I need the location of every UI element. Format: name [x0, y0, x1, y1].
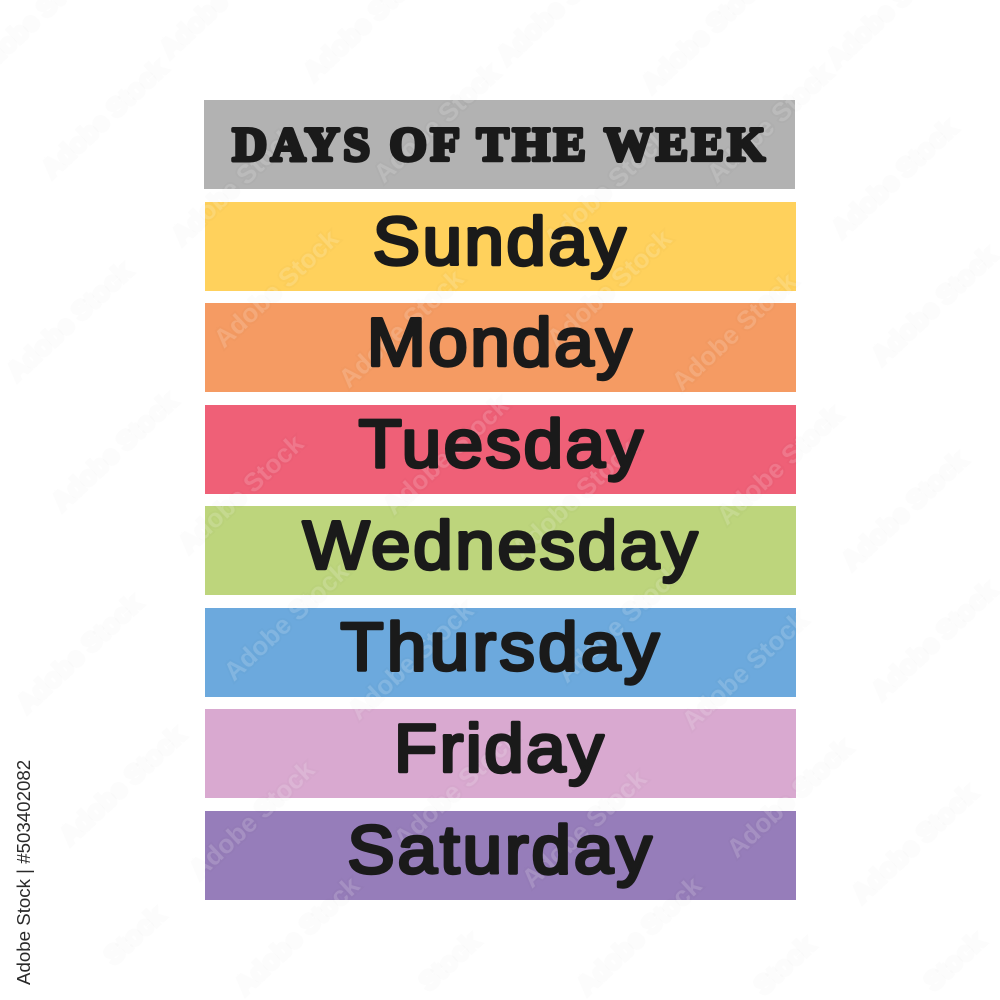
stock watermark overlay: Adobe Stock: [676, 605, 813, 736]
stock watermark overlay: Adobe Stock: [571, 870, 708, 1000]
stock watermark overlay: Adobe Stock: [666, 266, 803, 397]
stock watermark overlay: Adobe Stock: [866, 240, 1000, 371]
stock watermark overlay: Adobe Stock: [343, 595, 480, 726]
stock watermark overlay: Adobe Stock: [846, 778, 983, 909]
stock id side text: Adobe Stock | #503402082: [13, 760, 34, 985]
stock watermark overlay: Adobe Stock: [36, 53, 173, 184]
stock watermark overlay: Adobe Stock: [208, 223, 345, 354]
stock watermark overlay: Adobe Stock: [1, 256, 138, 387]
stock watermark overlay: Adobe Stock: [516, 763, 653, 894]
stock watermark overlay: Stock: [413, 926, 485, 997]
label: Sunday: Sunday: [373, 203, 628, 279]
stock watermark overlay: Adobe Stock: [701, 58, 838, 189]
stock watermark overlay: Adobe Stock: [378, 390, 515, 521]
stock watermark overlay: Adobe Stock: [173, 428, 310, 559]
stock watermark overlay: Adobe Stock: [826, 113, 963, 244]
band: Thursday: [205, 608, 796, 697]
stock watermark overlay: Stock: [918, 926, 990, 997]
stock watermark overlay: Adobe Stock: [229, 870, 366, 1000]
stock watermark overlay: Adobe Stock: [836, 445, 973, 576]
label: Monday: Monday: [367, 304, 634, 380]
label: Saturday: Saturday: [347, 811, 655, 888]
band: Monday: [205, 303, 796, 392]
stock watermark overlay: Adobe Stock: [711, 400, 848, 531]
stock watermark overlay: Adobe Stock: [11, 588, 148, 719]
title banner: [204, 100, 795, 189]
band: Friday: [205, 709, 796, 798]
band: Tuesday: [205, 405, 796, 494]
stock watermark overlay: Adobe Stock: [368, 58, 505, 189]
stock watermark overlay: Adobe Stock: [184, 754, 321, 885]
stock watermark overlay: Adobe Stock: [551, 558, 688, 689]
band: Sunday: [205, 202, 796, 291]
label: Wednesday: Wednesday: [303, 507, 700, 583]
stock watermark overlay: Adobe Stock: [541, 223, 678, 354]
stock watermark overlay: Adobe Stock: [333, 263, 470, 394]
stock watermark overlay: Adobe Stock: [46, 386, 183, 517]
stock watermark overlay: Adobe Stock: [506, 433, 643, 564]
stock watermark overlay: Adobe Stock: [218, 556, 355, 687]
stock watermark overlay: Stock: [98, 900, 170, 971]
stock watermark overlay: Adobe Stock: [388, 723, 525, 854]
band: Saturday: [205, 811, 796, 900]
label: Thursday: Thursday: [340, 608, 663, 685]
stock watermark overlay: Adobe Stock: [166, 120, 303, 251]
stock watermark overlay: Adobe Stock: [54, 720, 191, 851]
stock watermark overlay: Adobe Stock: [721, 733, 858, 864]
band: Wednesday: [205, 506, 796, 595]
title text: DAYS OF THE WEEK: [232, 118, 769, 172]
label: Friday: Friday: [394, 710, 606, 786]
label: Tuesday: Tuesday: [359, 405, 645, 482]
stock watermark overlay: Stock: [748, 930, 820, 1000]
stock watermark overlay: Adobe Stock: [866, 575, 1000, 706]
stock watermark overlay: Adobe Stock: [538, 123, 675, 254]
